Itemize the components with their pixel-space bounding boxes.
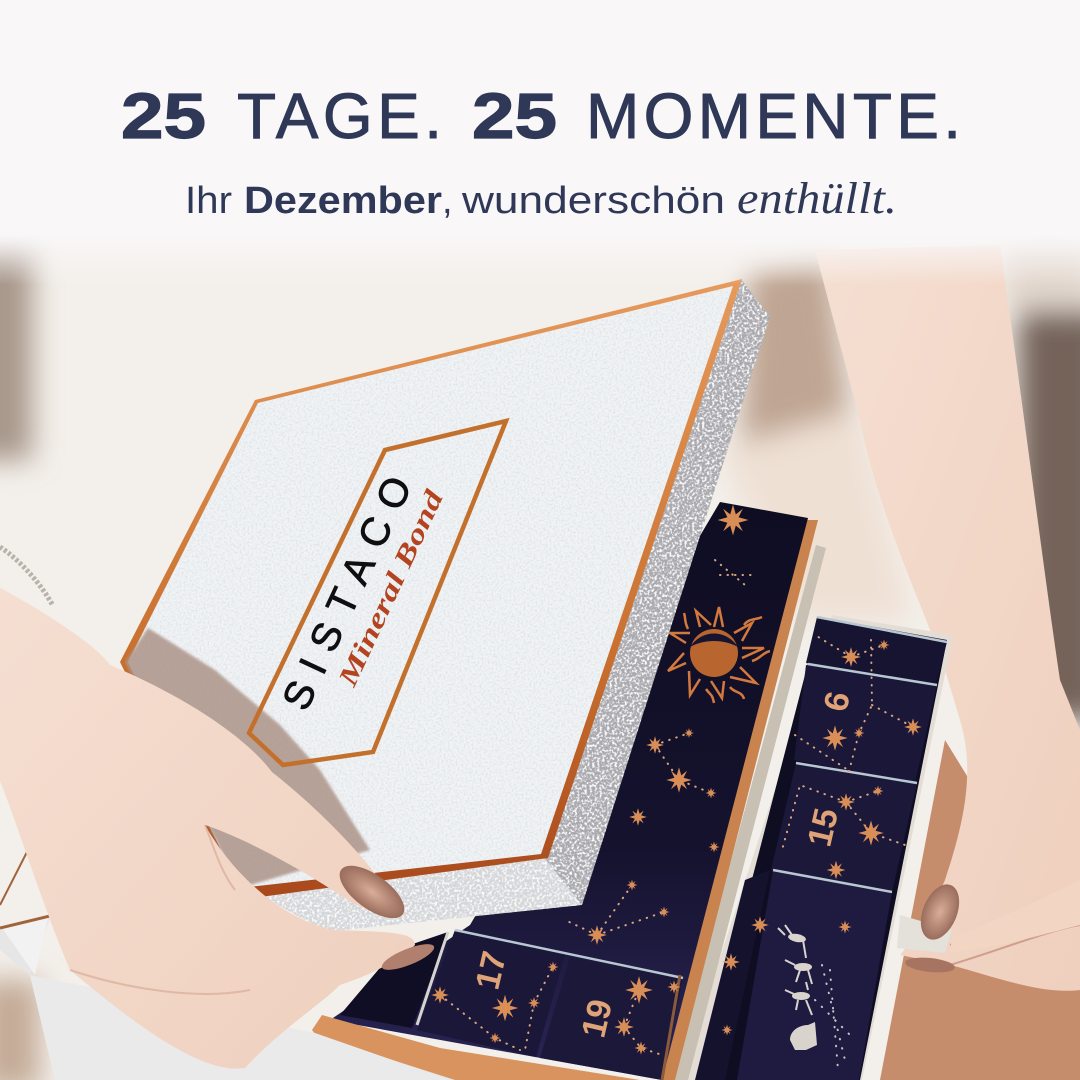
lid shadow: [125, 628, 370, 888]
lid side glitter: [235, 279, 770, 932]
subtitle: enthüllt.: [737, 174, 897, 223]
constellation dots: [440, 560, 913, 1055]
copper tray front and silver base: [0, 850, 640, 1080]
icon: sun and moon: [668, 607, 770, 703]
icon: reindeer sleigh: [778, 925, 817, 1050]
day numbers: 15: [801, 805, 846, 850]
left hand: [0, 547, 437, 1069]
right arm and hand: [815, 245, 1080, 991]
day numbers: 6: [817, 688, 858, 715]
subtitle: Ihr: [185, 180, 232, 222]
title: 25: [472, 80, 557, 152]
box lid: [120, 279, 770, 932]
lid glitter: [128, 286, 733, 888]
logo: Mineral Bond: Mineral Bond: [332, 485, 449, 692]
day numbers: 17: [469, 948, 514, 993]
lid copper edge: [120, 279, 742, 900]
logo frame: [249, 421, 506, 765]
drawer boxes: [340, 617, 947, 1080]
title: 25: [121, 80, 206, 152]
top fade panel: [0, 0, 1080, 285]
day numbers: [469, 688, 858, 1041]
calendar tray: outer frame: [330, 502, 953, 1080]
right hand nails and tab: [897, 879, 1080, 975]
lid top face: [128, 286, 733, 888]
santa trail dots: [815, 965, 855, 1070]
nail: forefinger: [331, 856, 413, 928]
subtitle: Dezember: [244, 180, 442, 222]
title: [121, 80, 961, 152]
stars: [431, 505, 922, 1055]
logo: SISTACO: SISTACO: [274, 470, 421, 717]
nail: middle finger: [379, 939, 437, 975]
subtitle: [185, 174, 897, 223]
day numbers: 19: [575, 996, 620, 1041]
subtitle: wunderschön: [461, 180, 725, 222]
bracelet: [0, 547, 53, 606]
title: TAGE.: [237, 80, 442, 152]
title: MOMENTE.: [586, 80, 961, 152]
subtitle: ,: [442, 180, 453, 222]
